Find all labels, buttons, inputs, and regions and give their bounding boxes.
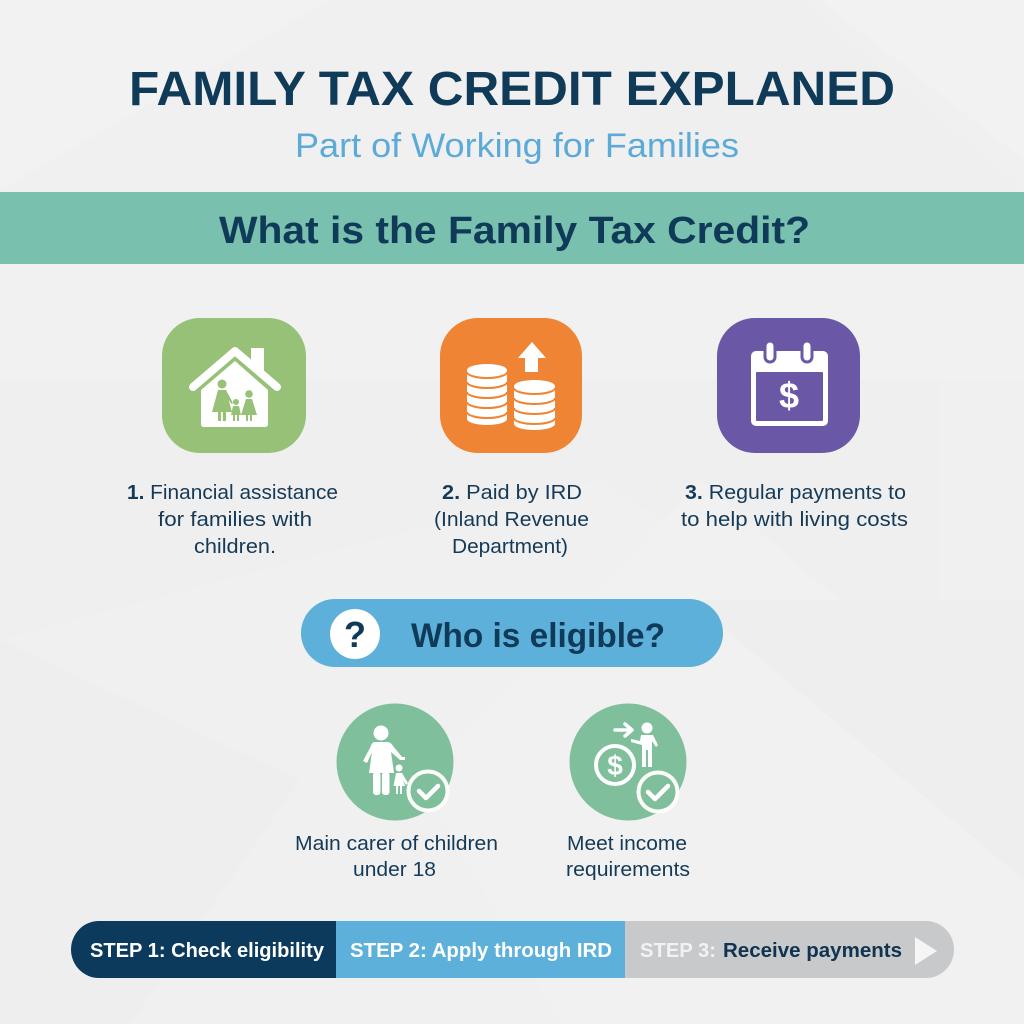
text: paid by IRD: (Inland Revenue (434, 508, 589, 531)
text: financial assistance: children. (194, 535, 276, 558)
step 1 (71, 921, 336, 978)
section banner: what is the family tax credit: What is the Family Tax Credit? (219, 210, 810, 252)
section pill: who is eligible (301, 599, 723, 667)
text: main carer (295, 832, 498, 881)
steps bar (71, 921, 954, 978)
text: main carer: under 18 (353, 858, 436, 881)
step 2 (336, 921, 625, 978)
text: main carer: Main carer of children (295, 832, 498, 855)
text: financial assistance (127, 481, 338, 558)
section pill: who is eligible: Who is eligible? (411, 617, 665, 655)
subtitle: Part of Working for Families (295, 127, 739, 165)
text: income requirements: requirements (566, 858, 690, 881)
step 3: Receive payments (723, 940, 902, 962)
step 2: STEP 2: Apply through IRD (350, 940, 612, 962)
title: FAMILY TAX CREDIT EXPLANED (129, 63, 895, 116)
text: regular payments (681, 481, 908, 531)
step 3 (625, 921, 954, 978)
section pill: who is eligible: ? (344, 614, 366, 655)
icon: income requirements (570, 704, 686, 820)
icon: coin stacks with up arrow (440, 318, 582, 453)
icon: main carer with child (336, 704, 454, 820)
text: financial assistance: for families with (158, 508, 312, 531)
icon: family in house (162, 318, 306, 453)
text: paid by IRD: Department) (452, 535, 568, 558)
icon: calendar with dollar: $ (779, 375, 799, 416)
text: income requirements: Meet income (567, 832, 687, 855)
text: regular payments: to help with living costs (681, 508, 908, 531)
step 1: STEP 1: Check eligibility (90, 940, 325, 962)
text: income requirements (566, 832, 690, 881)
icon: calendar with dollar (717, 318, 860, 453)
text: regular payments: 3. Regular payments to (685, 481, 906, 504)
icon: income requirements: $ (607, 750, 623, 781)
step 3: STEP 3: (640, 940, 716, 962)
text: paid by IRD (434, 481, 589, 558)
text: financial assistance: 1. Financial assistance (127, 481, 338, 504)
section banner: what is the family tax credit (0, 192, 1024, 264)
text: paid by IRD: 2. Paid by IRD (442, 481, 582, 504)
